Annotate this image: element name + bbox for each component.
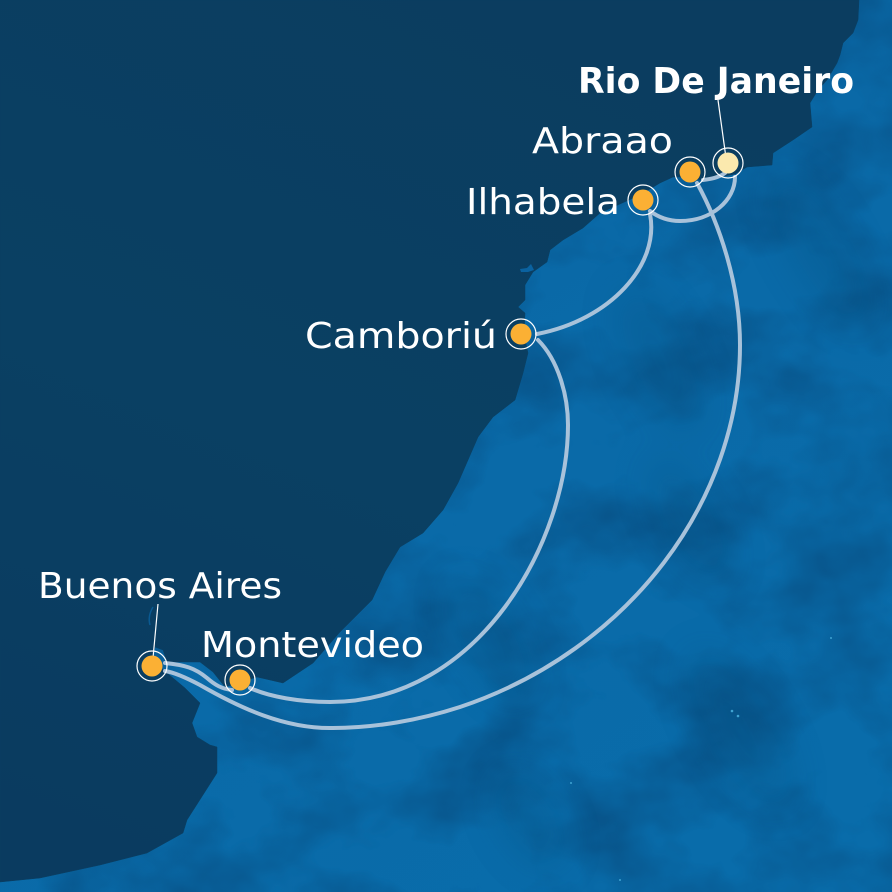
label: Ilhabela: Ilhabela	[466, 182, 620, 223]
route: Buenos Aires to Montevideo	[165, 663, 232, 690]
river sliver	[149, 607, 153, 625]
marker: Buenos Aires	[137, 651, 167, 681]
leader line: Rio De Janeiro	[718, 100, 726, 158]
route lines	[165, 173, 740, 728]
island near coast	[520, 264, 534, 272]
ocean dark patches	[431, 158, 889, 882]
label: Camboriú: Camboriú	[305, 316, 497, 357]
label: Montevideo: Montevideo	[201, 625, 424, 666]
label: Buenos Aires: Buenos Aires	[38, 566, 282, 607]
route: Rio De Janeiro to Abraao	[703, 173, 725, 180]
marker: Rio De Janeiro	[713, 148, 743, 178]
marker: Montevideo	[225, 665, 255, 695]
label: Abraao: Abraao	[532, 121, 673, 162]
route: Ilhabela to Camboriu	[537, 214, 651, 334]
marker: Abraao	[675, 157, 705, 187]
ocean specks	[570, 637, 832, 881]
route: Camboriu to Montevideo	[250, 340, 568, 702]
leader line: Buenos Aires	[153, 604, 158, 658]
route: Rio De Janeiro to Ilhabela	[650, 177, 735, 221]
label: Rio De Janeiro: Rio De Janeiro	[578, 61, 854, 102]
marker: Ilhabela	[628, 185, 658, 215]
marker: Camboriu	[506, 319, 536, 349]
route: Abraao to Buenos Aires	[165, 183, 740, 728]
